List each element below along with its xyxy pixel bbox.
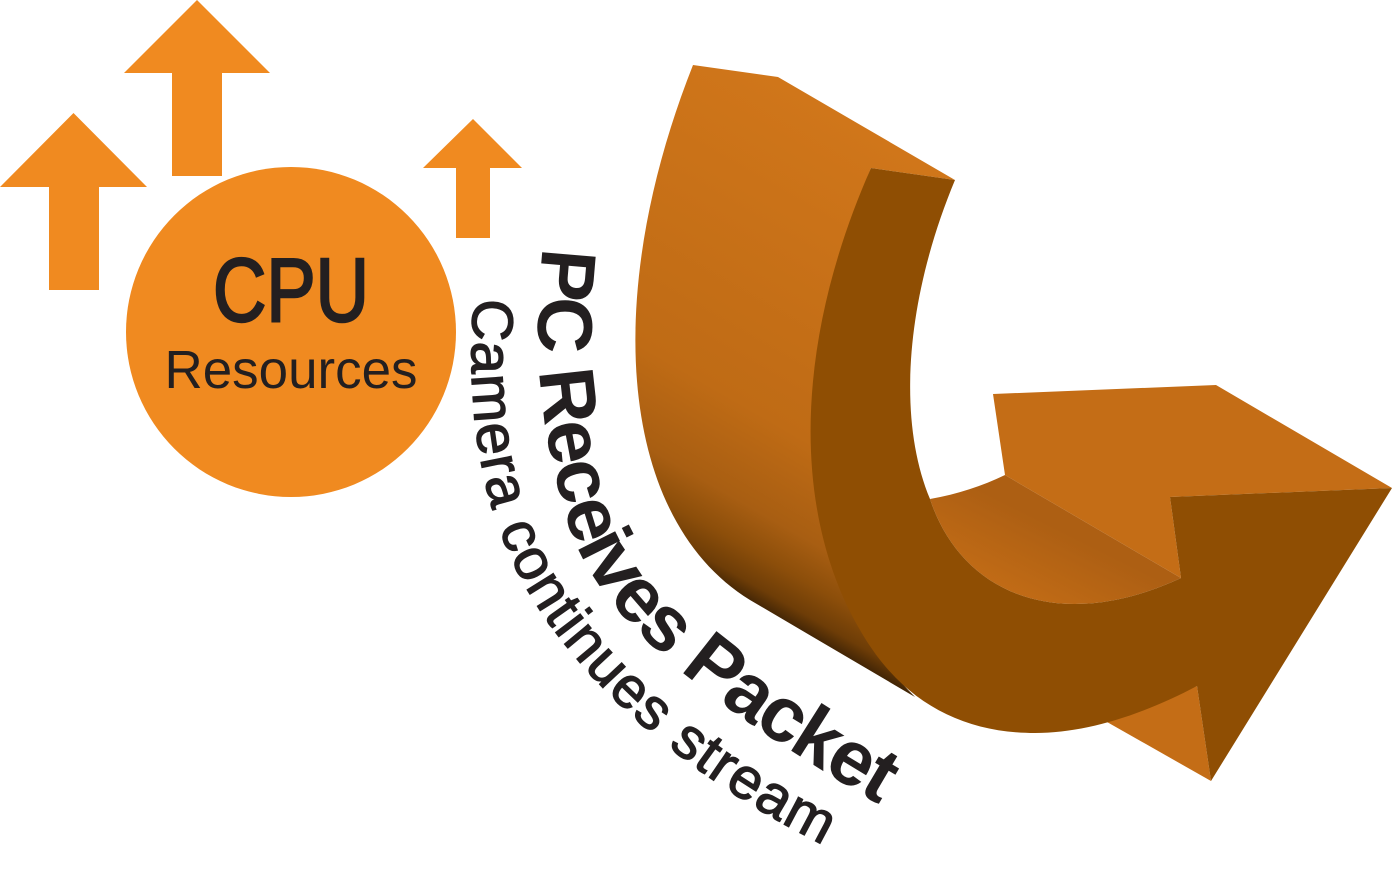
arrow: up top (124, 0, 270, 176)
curved heading: PC Receives Packet: PC Receives Packet (537, 252, 899, 804)
curved 3D arrow (635, 65, 1392, 781)
CPU label: CPU (213, 241, 369, 341)
CPU resources circle (126, 167, 456, 497)
arrow outer side face (635, 65, 955, 697)
arrow head top face (993, 385, 1392, 578)
arrow inner curve face (930, 475, 1181, 604)
arrow front face (811, 168, 1392, 781)
arrow: up right (423, 119, 522, 238)
curved subheading: Camera continues stream: Camera continues stream (470, 302, 832, 844)
arrow head lower face (1107, 686, 1211, 781)
Resources label: Resources (164, 340, 418, 400)
arrow: up left (0, 113, 147, 290)
